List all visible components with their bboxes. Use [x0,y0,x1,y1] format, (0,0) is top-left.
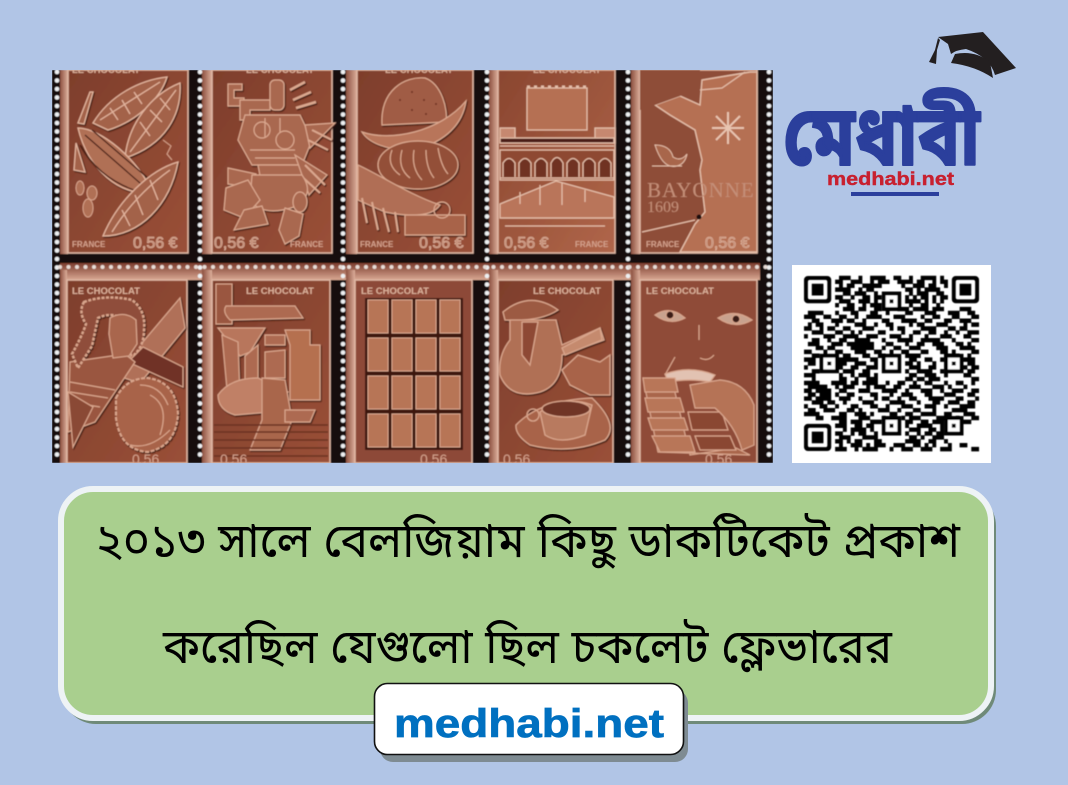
stamp 1: cocoa pods [68,65,188,253]
stamp 1: cocoa pods: 0,56 € [133,235,178,252]
QR finder patterns [804,276,979,451]
stamp 9: pot and cup [498,280,613,467]
stamp 3: man with hat: LE CHOCOLAT [385,65,453,76]
stamp 8: chocolate bar: LE CHOCOLAT [361,286,429,297]
stamp 5: map of Bayonne: 1609 [647,199,679,216]
icon: graduation cap [929,32,1016,78]
website badge [374,684,688,762]
stamp 10: face eating chocolate: 0,56 [705,451,732,467]
stamp 7: chocolate machine [212,280,330,467]
perforations [57,72,770,462]
website badge: medhabi.net [394,702,664,746]
stamp 4: building: 0,56 € [504,235,549,252]
stamp 2: aztec figure: FRANCE [290,240,324,249]
stamp 2: aztec figure [212,65,335,253]
stamp 4: building: LE CHOCOLAT [533,65,601,76]
stamp 4: building [498,65,615,253]
stamp 7: chocolate machine: 0,56 [220,451,247,467]
stamp 6: portraits: 0,56 [132,451,159,467]
stamp 1: cocoa pods: LE CHOCOLAT [72,65,140,76]
stamp 5: map of Bayonne: 0,56 € [705,235,750,252]
stamp 3: man with hat: 0,56 € [419,235,464,252]
photo: chocolate stamps sheet [52,65,773,467]
logo url: medhabi.net [827,169,954,189]
caption line 2: করেছিল যেগুলো ছিল চকলেট ফ্লেভারের [162,619,893,674]
compass rose [712,112,744,144]
QR code [792,265,991,463]
logo wordmark: মেধাবী [783,88,981,183]
caption line 1: ২০১৩ সালে বেলজিয়াম কিছু ডাকটিকেট প্রকাশ [95,513,961,570]
stamp 10: face eating chocolate: LE CHOCOLAT [646,286,714,297]
stamp 2: aztec figure: LE CHOCOLAT [246,65,314,76]
stamp 6: portraits: LE CHOCOLAT [72,286,140,297]
stamp 5: map of Bayonne: FRANCE [646,240,680,249]
logo underline [851,192,939,196]
stamp 7: chocolate machine: LE CHOCOLAT [246,286,314,297]
horizontal margin band between rows [60,263,760,280]
island [652,145,687,167]
stamp 3: man with hat [357,65,473,253]
stamp 1: cocoa pods: FRANCE [72,240,106,249]
stamp 9: pot and cup: LE CHOCOLAT [533,286,601,297]
stamp 3: man with hat: FRANCE [360,240,394,249]
logo: medhabi [783,32,1016,196]
panel: green caption box [61,489,996,724]
stamp 5: map of Bayonne: BAYONNE [647,178,755,202]
QR alignment patterns [822,294,962,434]
stamp 4: building: FRANCE [575,240,609,249]
stamp 5: map of Bayonne [640,70,757,253]
stamp 9: pot and cup: 0,56 [503,451,530,467]
stamp 6: portraits [67,280,187,467]
stamp 8: chocolate bar [355,280,472,467]
stamp margins [60,70,640,463]
stamp 2: aztec figure: 0,56 € [214,235,259,252]
stamp 10: face eating chocolate [640,280,757,467]
stamp 8: chocolate bar: 0,56 [420,451,447,467]
